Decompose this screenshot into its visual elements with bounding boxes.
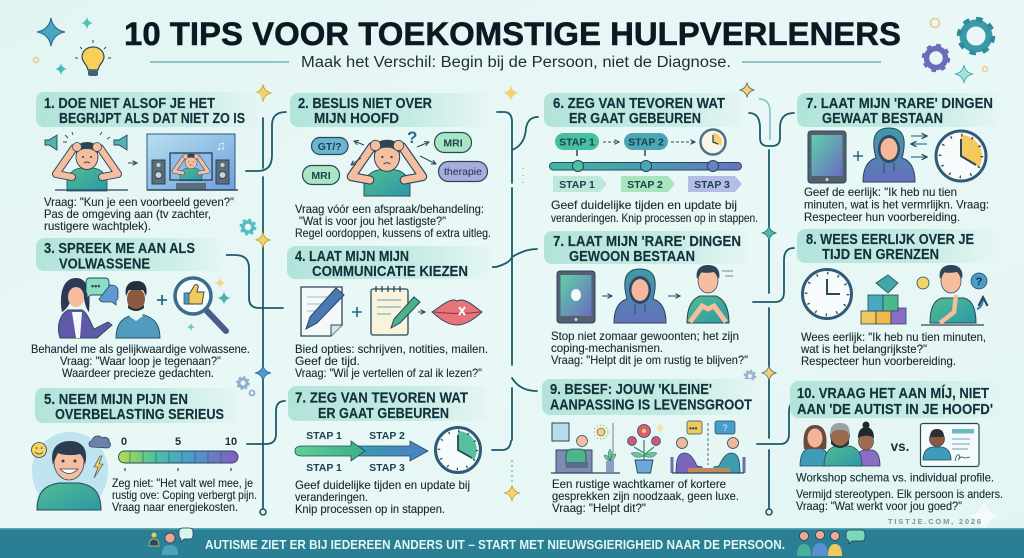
text block: Geef duidelijke tijden en update bij: [295, 478, 470, 492]
heading: TIJD EN GRENZEN: [822, 247, 939, 263]
icon: person covering ears between speakers: [45, 132, 137, 191]
text block: [31, 342, 250, 380]
step chevrons: STAP 2: [627, 179, 663, 191]
pain scale chart: [118, 436, 238, 471]
heading: 4. LAAT MIJN MIJN: [295, 249, 409, 265]
text block: Stop niet zomaar gewoonten; het zijn: [551, 329, 739, 343]
panel: tip 7 middle: [544, 231, 749, 367]
heading: [35, 388, 240, 423]
text block: [800, 330, 986, 368]
icon: woman and man talking: [58, 278, 160, 338]
text block: [295, 202, 491, 240]
heading: 8. WEES EERLIJK OVER JE: [806, 232, 974, 248]
pain scale chart: 5: [175, 436, 181, 448]
heading: OVERBELASTING SERIEUS: [55, 407, 224, 423]
text block: Pas de omgeving aan (tv zachter,: [44, 207, 211, 221]
heading: [797, 93, 1002, 127]
title: 10 TIPS VOOR TOEKOMSTIGE HULPVERLENERS: [124, 16, 901, 52]
heading: [36, 92, 262, 127]
icon: thinking person: ?: [976, 276, 983, 288]
footer band: [0, 528, 1024, 558]
heading: [290, 93, 490, 127]
step chevrons: [553, 176, 742, 192]
text block: rustig ove: Coping verbergt pijn.: [112, 488, 257, 502]
icon: clock: [936, 131, 986, 181]
icon: notepad and pencil: [352, 286, 425, 335]
icon: stressed person with choices: MRI: [311, 170, 331, 182]
text block: [295, 478, 470, 516]
timeline bar: [550, 160, 742, 172]
icon: clock: [700, 130, 726, 154]
heading: 2. BESLIS NIET OVER: [298, 96, 432, 112]
text block: Vraag: "Wat werkt voor jou goed?": [796, 499, 962, 513]
text block: [551, 329, 748, 367]
heading: 7. LAAT MIJN 'RARE' DINGEN: [806, 96, 993, 112]
text block: Respecteer hun voorbereiding.: [801, 354, 956, 368]
text block: Vraag: "Helpt dit?": [552, 501, 646, 515]
text block: [804, 185, 989, 224]
connectors and timelines: [220, 99, 797, 515]
subtitle: Maak het Verschil: Begin bij de Persoon, niet de Diagnose.: [301, 54, 731, 71]
text block: [796, 470, 1003, 513]
icon: stressed person with choices: [302, 128, 488, 196]
heading: 9. BESEF: JOUW 'KLEINE': [550, 382, 712, 398]
pain scale chart: 10: [225, 436, 237, 448]
icon: thinking person: [917, 265, 987, 325]
text block: Geef de tijd.: [295, 354, 360, 368]
text block: Waardeer precieze gedachten.: [62, 366, 214, 380]
panel: tip 7 bottom: [288, 386, 488, 516]
text block: Respecteer hun voorbereiding.: [804, 210, 960, 224]
icon: footer people right: [797, 530, 865, 556]
icon: flowers in pot: [628, 423, 665, 473]
text block: minuten, wat is het vermrlijkn. Vraag:: [804, 198, 989, 212]
heading: GEWAAT BESTAAN: [822, 111, 943, 127]
icon: group of three people: [800, 422, 880, 466]
heading: 6. ZEG VAN TEVOREN WAT: [553, 96, 725, 112]
text block: coping-mechanismen.: [551, 341, 663, 355]
text block: Geef de eerlijk: "Ik heb nu tien: [804, 185, 957, 199]
heading: MIJN HOOFD: [314, 111, 399, 127]
text block: Vraag vóór een afspraak/behandeling:: [295, 202, 484, 216]
icon: paper and pen: [301, 287, 344, 336]
heading: [288, 386, 488, 422]
panel: tip 6: [544, 93, 758, 225]
heading: GEWOON BESTAAN: [569, 249, 695, 265]
heading: VOLWASSENE: [59, 256, 150, 272]
icon: two people talking: •••: [689, 424, 698, 433]
step bubbles: [555, 133, 695, 156]
heading: [544, 93, 744, 127]
icon: magnifier with thumbs up: [157, 278, 230, 331]
arrow steps: STAP 1: [306, 462, 342, 474]
arrow steps: STAP 3: [369, 462, 405, 474]
footer text: AUTISME ZIET ER BIJ IEDEREEN ANDERS UIT – START MET NIEUWSGIERIGHEID NAAR DE PERSOON.: [205, 537, 785, 552]
panel: tip 7 right: [797, 93, 1002, 224]
text block: gesprekken zijn noodzaak, geen luxe.: [552, 489, 739, 503]
icon: two people talking: ?: [722, 423, 728, 433]
text block: Vraag: "Helpt dit je om rustig te blijven?": [551, 353, 748, 367]
panel: tip 10: [790, 381, 1005, 513]
heading: AAN 'DE AUTIST IN JE HOOFD': [797, 402, 993, 418]
icon: monitor with speakers: [147, 134, 238, 190]
heading: 3. SPREEK ME AAN ALS: [44, 241, 195, 257]
arrow steps: STAP 1: [306, 430, 342, 442]
step bubbles: STAP 1: [559, 136, 595, 148]
heading: [542, 379, 757, 415]
heading: [790, 381, 1005, 418]
heading: 10. VRAAG HET AAN MÍJ, NIET: [797, 385, 989, 402]
text block: [551, 198, 758, 225]
icon: quiet waiting room: [551, 423, 620, 473]
icon: stressed person with choices: ?: [407, 128, 417, 147]
heading: 7. LAAT MIJN 'RARE' DINGEN: [553, 234, 741, 250]
icon: stressed person with choices: GT/?: [318, 141, 342, 153]
text block: Behandel me als gelijkwaardige volwassene.: [31, 342, 250, 356]
text block: [295, 342, 488, 380]
text block: Geef duidelijke tijden en update bij: [551, 198, 737, 212]
icon: gears and stars: [924, 18, 993, 83]
heading: [36, 238, 226, 272]
icon: woman and man talking: •••: [91, 281, 100, 291]
heading: BEGRIJPT ALS DAT NIET ZO IS: [59, 111, 245, 127]
panel: tip 1: [36, 92, 262, 233]
panel: tip 5: [32, 388, 257, 514]
text block: "Wat is voor jou het lastigste?": [299, 214, 446, 228]
text block: veranderingen.: [295, 490, 368, 504]
text block: Vraag: "Wil je vertellen of zal ik lezen?": [295, 366, 482, 380]
text block: Knip processen op in stappen.: [295, 502, 445, 516]
icon: profile card: [920, 424, 979, 466]
panel: tip 9: [542, 379, 757, 515]
heading: AANPASSING IS LEVENSGROOT: [550, 398, 752, 414]
icon: two people talking: [672, 421, 744, 473]
heading: ER GAAT GEBEUREN: [318, 406, 449, 422]
panel: tip 3: [31, 238, 250, 380]
arrow steps: [295, 430, 428, 474]
step chevrons: STAP 1: [559, 179, 595, 191]
heading: COMMUNICATIE KIEZEN: [312, 264, 468, 280]
panel: tip 8: [797, 229, 997, 368]
vs label: vs.: [891, 439, 909, 454]
pain scale chart: 0: [121, 436, 127, 448]
icon: tablet and hoodie: [808, 128, 927, 183]
heading: 5. NEEM MIJN PIJN EN: [44, 392, 188, 408]
text block: veranderingen. Knip processen op in stappen.: [551, 211, 758, 225]
text block: [112, 476, 257, 514]
panel: tip 4: [287, 246, 492, 380]
icon: tablet, hoodie, calm person: [557, 265, 733, 323]
icon: building blocks: [861, 275, 906, 324]
icon: lips: [432, 300, 482, 325]
panel: tip 2: [290, 93, 491, 240]
icon: stressed person with choices: MRI: [443, 138, 463, 150]
text block: rustigere wachtplek).: [44, 219, 151, 233]
icon: footer people left: [149, 528, 193, 555]
text block: Vraag: "Kun je een voorbeeld geven?": [44, 195, 234, 209]
icon: clock: [802, 270, 852, 318]
credit: TISTJE.COM, 2026: [888, 517, 981, 526]
decorative stars and gears along timelines: [237, 82, 1000, 532]
arrow steps: STAP 2: [369, 430, 405, 442]
text block: Bied opties: schrijven, notities, mailen.: [295, 342, 488, 356]
text block: Regel oordoppen, kussens of extra uitleg.: [295, 226, 491, 240]
heading: [287, 246, 492, 280]
text block: Een rustige wachtkamer of kortere: [552, 477, 726, 491]
text block: Wees eerlijk: "Ik heb nu tien minuten,: [801, 330, 986, 344]
icon: clock: [436, 428, 480, 472]
step bubbles: STAP 2: [628, 136, 664, 148]
icon: stars and light bulb: [34, 17, 111, 76]
text block: wat is het belangrijkste?": [800, 342, 927, 356]
text block: Vraag: "Waar loop je tegenaan?": [60, 354, 221, 368]
heading: 1. DOE NIET ALSOF JE HET: [44, 96, 215, 112]
text block: Workshop schema vs. individual profile.: [796, 470, 994, 484]
text block: Zeg niet: "Het valt wel mee, je: [112, 476, 253, 490]
heading: [797, 229, 997, 263]
text block: Vermijd stereotypen. Elk persoon is anders.: [796, 487, 1003, 501]
text block: Vraag naar energiekosten.: [112, 500, 238, 514]
heading: ER GAAT GEBEUREN: [569, 111, 701, 127]
text block: [44, 195, 234, 233]
heading: 7. ZEG VAN TEVOREN WAT: [295, 390, 468, 406]
icon: monitor with speakers: ♫: [216, 138, 226, 153]
heading: [544, 231, 749, 265]
icon: stressed person with choices: therapie: [444, 166, 482, 178]
step chevrons: STAP 3: [694, 179, 730, 191]
text block: [552, 477, 739, 515]
icon: smiling person with mood symbols: [32, 432, 110, 510]
